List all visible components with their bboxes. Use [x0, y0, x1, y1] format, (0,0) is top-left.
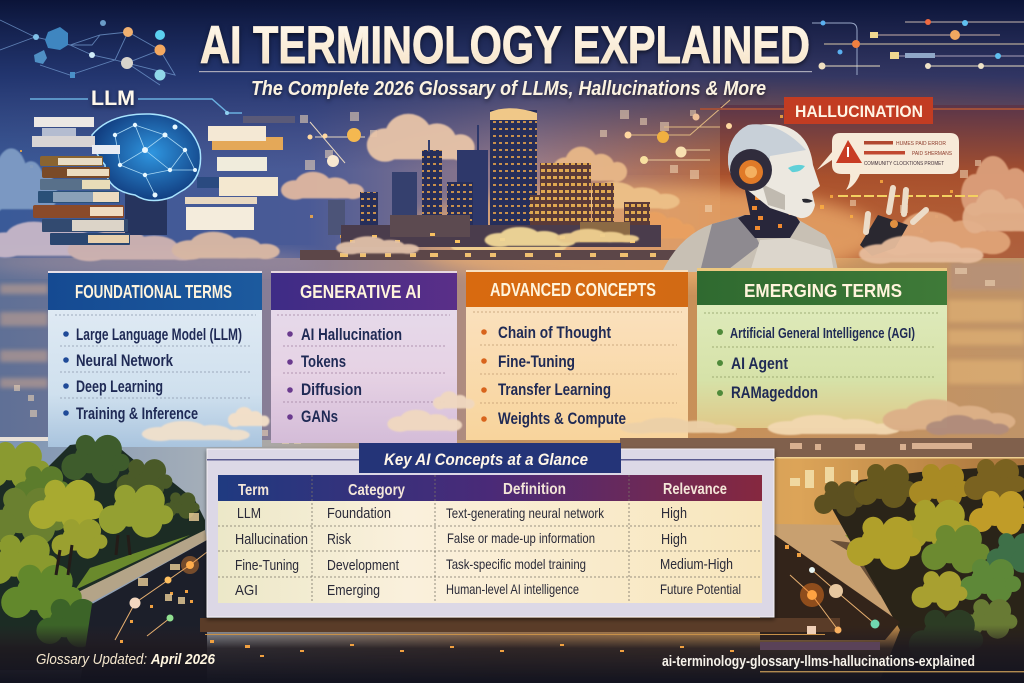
- icon: glowing neural brain: [92, 114, 201, 235]
- term list: AI Agent: [731, 354, 788, 373]
- trees: right cluster: [775, 459, 1024, 680]
- term list: [277, 315, 450, 426]
- mouth: [802, 199, 813, 203]
- term list: Diffusion: [301, 381, 362, 399]
- term list: RAMageddon: [731, 383, 818, 402]
- table title: [359, 443, 621, 473]
- table rows: Foundation: [327, 505, 391, 522]
- speech bubble with warning: [817, 133, 959, 190]
- panel: foundational terms: [48, 271, 262, 447]
- term list: [55, 315, 256, 423]
- heading: GENERATIVE AI: [300, 282, 421, 302]
- table: [218, 475, 762, 603]
- eye: [788, 165, 805, 172]
- panel: key ai concepts table: [207, 443, 774, 617]
- term list: Fine-Tuning: [498, 353, 575, 371]
- band of pixels under the cloud bank: [0, 437, 1024, 488]
- city skyline: [300, 108, 700, 260]
- term list: GANs: [301, 408, 338, 426]
- glow line near hand: [838, 195, 980, 197]
- term list: Transfer Learning: [498, 381, 611, 399]
- term list: Neural Network: [76, 352, 174, 370]
- LLM label with connector: LLM: [91, 87, 135, 110]
- clouds: horizon bank: [0, 114, 1024, 261]
- table rows: Future Potential: [660, 581, 741, 597]
- table rows: Hallucination: [235, 531, 308, 548]
- table header row: Definition: [503, 481, 566, 498]
- term list: [704, 313, 940, 402]
- table rows: Development: [327, 557, 400, 574]
- panel: generative ai: [271, 271, 457, 443]
- table rows: Task-specific model training: [446, 556, 586, 572]
- term list: Chain of Thought: [498, 324, 611, 342]
- table rows: Human-level AI intelligence: [446, 581, 579, 597]
- table rows: Emerging: [327, 582, 380, 599]
- term list: Artificial General Intelligence (AGI): [730, 326, 915, 342]
- term list: Weights & Compute: [498, 410, 626, 428]
- grass: [75, 535, 190, 590]
- robot hand: [860, 188, 926, 256]
- term list: AI Hallucination: [301, 326, 402, 344]
- icon: stack of books: [33, 156, 130, 245]
- term list: Training & Inference: [76, 405, 198, 423]
- table rows: Fine-Tuning: [235, 557, 299, 574]
- neural network constellation: [0, 20, 175, 85]
- term list: Deep Learning: [76, 378, 163, 396]
- side cloud strata: [0, 262, 1024, 388]
- neck lights: [752, 195, 782, 230]
- table rows: High: [661, 531, 687, 548]
- term list: Tokens: [301, 353, 346, 371]
- robot body: [662, 215, 838, 272]
- table rows: High: [661, 505, 687, 522]
- panel: advanced concepts: [466, 270, 688, 440]
- hallucination tag: [700, 97, 1024, 124]
- table rows: False or made-up information: [447, 530, 595, 546]
- path: [72, 530, 207, 602]
- heading: ADVANCED CONCEPTS: [490, 280, 656, 300]
- table rows: LLM: [237, 505, 261, 522]
- table rows: Medium-High: [660, 556, 733, 573]
- speech bubble with warning: HUMES PAID ERROR: [896, 141, 946, 147]
- table header row: Relevance: [663, 481, 727, 498]
- table rows: AGI: [235, 582, 258, 599]
- speech bubble with warning: COMMUNITY CLOCKTIONS PROMET: [864, 161, 944, 167]
- robot neck: [745, 190, 790, 238]
- table title: Key AI Concepts at a Glance: [384, 450, 588, 469]
- table header row: Category: [348, 482, 405, 499]
- top-right circuit traces: [308, 19, 1024, 167]
- speech bubble with warning: PAID SHERMANS: [912, 151, 953, 157]
- ear module: [730, 149, 772, 191]
- robot figure: [662, 124, 838, 272]
- clouds: in front of skyline: [336, 227, 639, 254]
- heading: EMERGING TERMS: [744, 281, 902, 301]
- panel: emerging terms: [697, 268, 947, 428]
- clouds: right foreground: [859, 189, 1024, 264]
- term list: [473, 312, 682, 428]
- hallucination tag: HALLUCINATION: [795, 102, 923, 121]
- table rows: Risk: [327, 531, 351, 548]
- table rows: Text-generating neural network: [446, 505, 605, 521]
- robot head: [728, 124, 820, 218]
- heading: FOUNDATIONAL TERMS: [75, 282, 232, 302]
- trees: left cluster: [0, 435, 207, 670]
- table rows: [235, 505, 741, 599]
- clouds: across panel bottoms: [142, 391, 1015, 441]
- term list: Large Language Model (LLM): [76, 326, 242, 344]
- table header row: Term: [238, 482, 269, 499]
- table header row: [238, 481, 727, 499]
- footer: page slug: ai-terminology-glossary-llms-hallucinations-explained: [662, 654, 975, 670]
- text snippets around the brain: [32, 116, 295, 230]
- title: AI TERMINOLOGY EXPLAINED: [200, 16, 810, 75]
- footer: glossary updated date: Glossary Updated: April 2026: [36, 651, 216, 668]
- LLM label with connector: [30, 87, 242, 115]
- subtitle: The Complete 2026 Glossary of LLMs, Hallucinations & More: [251, 78, 766, 100]
- ground road, lights and nodes: [0, 513, 1024, 683]
